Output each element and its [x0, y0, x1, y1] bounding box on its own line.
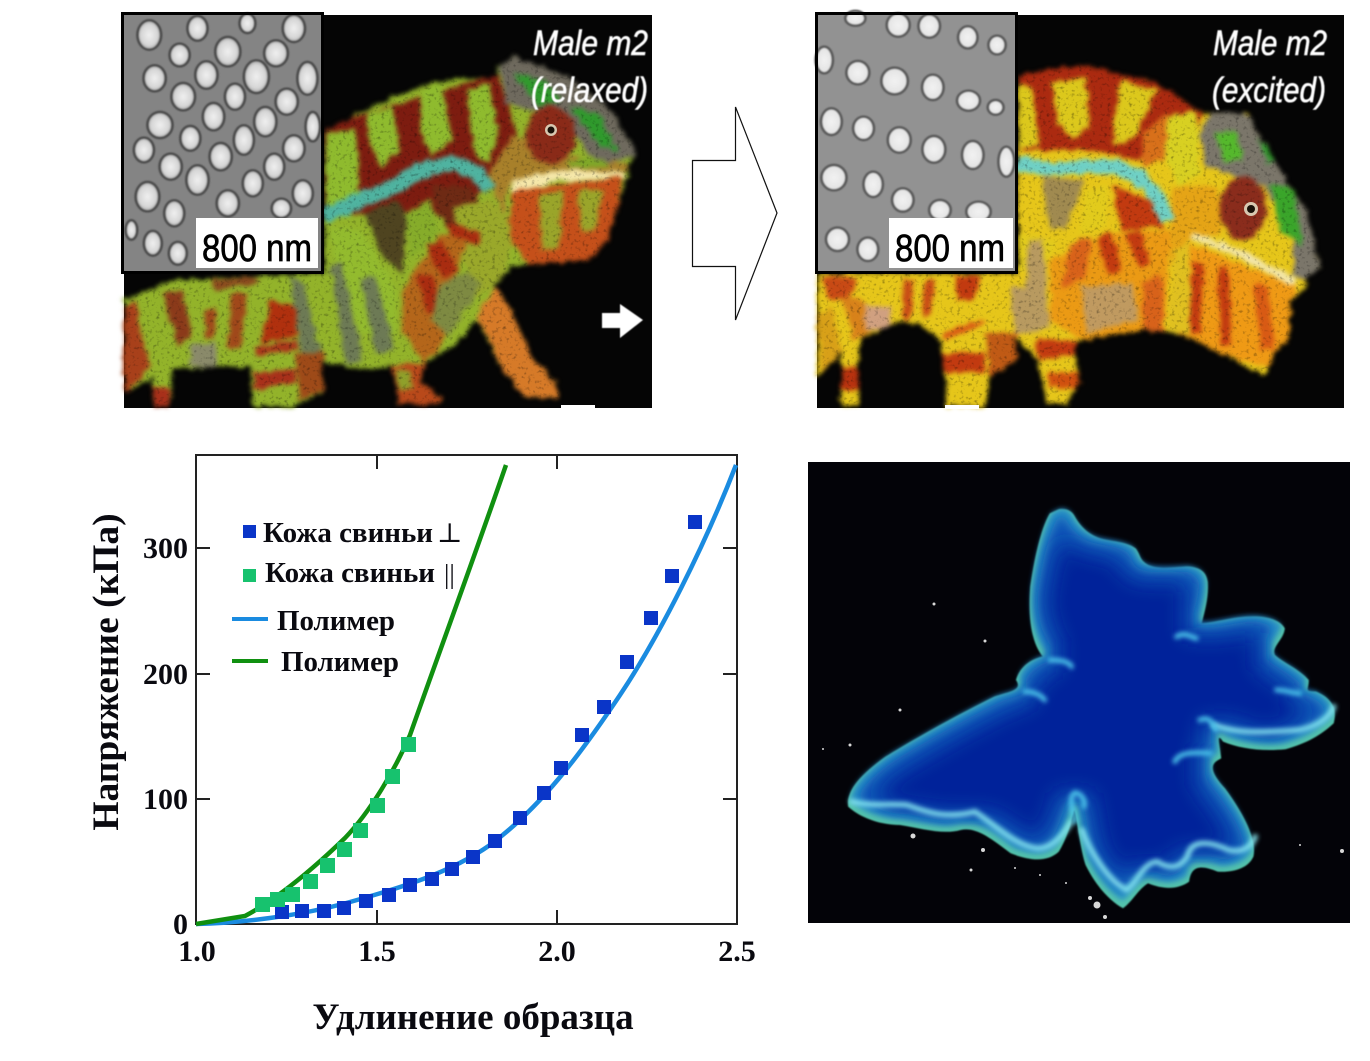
x axis numbers: 1.5 [358, 935, 396, 968]
y axis numbers: 0 [173, 908, 188, 941]
inset frame excited [816, 14, 1016, 272]
legend row: pig skin parallel: Кожа свиньи [265, 558, 435, 589]
creases [1025, 634, 1300, 822]
chameleon body excited [812, 62, 1324, 412]
y axis numbers: 100 [143, 783, 188, 816]
x axis title: Удлинение образца [312, 997, 634, 1038]
chameleon body relaxed [118, 52, 638, 412]
x axis numbers [178, 935, 756, 968]
caption relaxed [531, 24, 648, 110]
inset frame relaxed [122, 14, 322, 272]
x axis numbers: 2.0 [538, 935, 576, 968]
y axis numbers: 200 [143, 658, 188, 691]
panel: blue butterfly film [808, 462, 1350, 923]
speckles [822, 602, 1344, 919]
polymer curve green [196, 465, 506, 924]
y axis title: Напряжение (кПа) [86, 513, 127, 831]
legend row: pig skin perpendicular: Кожа свиньи [263, 518, 433, 549]
legend row: polymer blue: Полимер [277, 606, 395, 637]
plot frame and ticks [196, 455, 737, 924]
eye excited [1244, 202, 1258, 216]
caption excited [1212, 24, 1327, 110]
x axis numbers: 1.0 [178, 935, 216, 968]
inset micrograph excited [816, 11, 1016, 272]
scale label relaxed: 800 nm [202, 228, 312, 270]
polymer curve blue [196, 465, 736, 924]
caption relaxed: Male m2 [533, 24, 648, 63]
scale label excited: 800 nm [895, 228, 1005, 270]
legend [232, 518, 462, 678]
butterfly shape [848, 506, 1335, 908]
caption excited: (excited) [1212, 71, 1326, 110]
photo background [817, 15, 1344, 408]
caption relaxed: (relaxed) [531, 71, 648, 110]
legend row: pig skin perpendicular: ⊥ [437, 518, 462, 548]
panel: chameleon excited [800, 0, 1357, 417]
y axis numbers [143, 532, 188, 941]
panel: chameleon relaxed [110, 0, 667, 417]
icon: small white arrow [602, 304, 643, 338]
legend row: polymer green: Полимер [281, 647, 399, 678]
legend row: pig skin parallel: || [444, 559, 455, 589]
inset micrograph relaxed [122, 14, 322, 272]
photo background [124, 15, 652, 408]
photo background [808, 462, 1350, 923]
caption excited: Male m2 [1213, 24, 1327, 63]
arrow: relaxed to excited [692, 107, 777, 320]
bright lower rim [852, 707, 1334, 890]
x axis numbers: 2.5 [718, 935, 756, 968]
pig skin parallel data [255, 737, 416, 912]
eye relaxed [545, 124, 557, 136]
chart: stress versus elongation [86, 455, 756, 1038]
y axis numbers: 300 [143, 532, 188, 565]
pig skin perpendicular data [275, 515, 702, 919]
